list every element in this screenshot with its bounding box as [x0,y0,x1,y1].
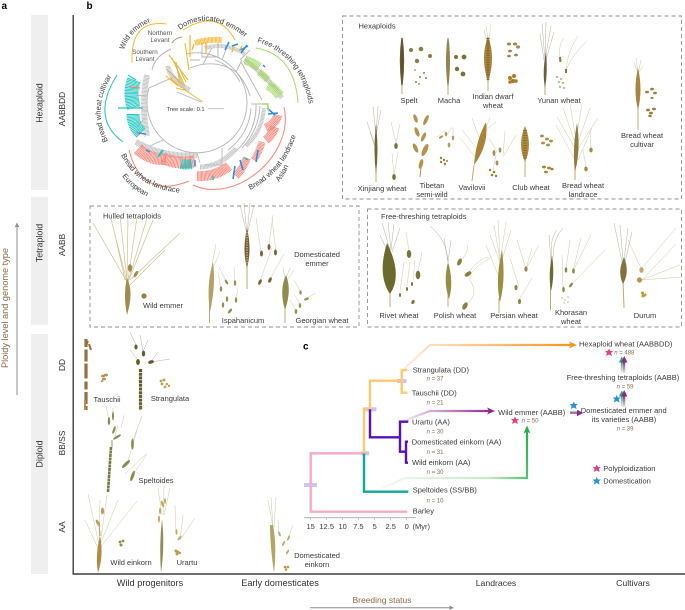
time axis: (Myr) [412,522,430,531]
divergence tree [304,370,408,512]
node: hexaploid wheat: Hexaploid wheat (AABBDD) [579,340,673,348]
tip cluster: domesticated emmer [190,35,248,57]
node: hexaploid wheat: n = 488 [614,350,635,356]
time axis: 10 [339,522,347,531]
genome type labels [57,92,67,533]
Club wheat [512,126,554,192]
macha [438,38,466,105]
taxon labels: n = 37 [427,376,444,382]
time axis [304,518,430,531]
khorasan wheat: Khorasan [555,308,587,317]
tree scale [166,107,224,113]
tauschii: Tauschii [93,395,121,404]
genome type labels: AABBDD [57,92,67,126]
taxon labels: n = 21 [427,400,444,406]
clade labels: Bread wheat landrace [248,135,296,190]
taxon labels: Wild einkorn (AA) [412,458,471,467]
khorasan wheat: wheat [560,317,582,326]
panel: free-threshing tetraploids [368,209,682,327]
taxon labels: Domesticated einkorn (AA) [412,438,502,446]
bread wheat landrace: landrace [569,190,597,199]
early domesticate: domesticated einkorn: Domesticated [294,551,340,560]
durum: Durum [634,311,656,320]
node: wild emmer [498,408,566,424]
arrow: ploidy increasing [15,222,19,395]
Indian dwarf wheat [473,24,520,110]
Tibetan semi-wild [412,114,454,199]
heading: hexaploids: Hexaploids [358,22,396,30]
speltoides: Speltoides [138,476,174,485]
Tibetan semi-wild: Tibetan [420,181,444,190]
clade labels: Free-threshing tetraploids [258,37,314,104]
clade labels [95,15,314,196]
node: free-threshing tetraploids [567,373,680,390]
taxon labels: Strangulata (DD) [413,365,469,374]
legend: Polyploidization [603,464,655,473]
bread wheat cultivar [621,58,664,149]
panel b: phylogenetic tree [95,15,314,196]
taxon labels: Speltoides (SS/BB) [413,486,477,495]
panel: hexaploids [342,16,682,199]
ploidy band: diploid [31,334,48,574]
Yunan wheat [537,22,587,105]
taxon labels: n = 30 [427,430,444,436]
group: diploid wild progenitors [85,332,197,573]
Vavilovii: Vavilovii [459,183,486,192]
domesticated emmer: Domesticated [294,250,340,259]
clade labels: Bread wheat landrace [121,153,180,192]
gray tip combs [136,46,282,167]
urartu: Urartu [177,558,197,567]
tip cluster: free-threshing tetraploids [245,60,280,96]
time axis: 7.5 [353,522,364,531]
node: domesticated emmer and varieties: Domesticated emmer and [581,406,667,415]
breeding stage labels: Landraces [476,578,517,588]
Club wheat: Club wheat [512,183,551,192]
node: domesticated emmer and varieties [581,406,667,432]
taxon labels: Urartu (AA) [412,418,450,426]
clade labels: Southern [132,49,158,56]
arrow: to hexaploid wheat [405,342,577,368]
rivet wheat [379,222,422,320]
clade labels: Wild emmer [119,18,150,48]
clade labels: Levant [136,56,155,63]
legend: Domestication [603,476,651,486]
ploidy band: hexaploid: Hexaploid [34,83,44,123]
ispahanicum: Ispahanicum [222,316,264,325]
macha: Macha [438,96,461,105]
clade labels: Domesticated emmer [178,15,248,36]
time axis: 0 [405,522,409,531]
strangulata [130,332,190,410]
domesticated emmer: emmer [305,259,329,268]
taxon labels: n = 10 [427,498,444,504]
node: wild emmer: n = 50 [522,418,539,424]
rivet wheat: Rivet wheat [379,311,420,320]
Indian dwarf wheat: Indian dwarf [473,92,514,101]
wild emmer: Wild emmer [143,301,183,310]
wild einkorn: Wild einkorn [110,558,152,567]
breeding stage labels: Early domesticates [241,578,319,588]
Vavilovii [459,118,516,192]
panel: hulled tetraploids [90,203,359,327]
time axis: 2.5 [385,522,396,531]
node: hexaploid wheat [579,340,673,356]
legend [593,464,655,486]
khorasan wheat [549,228,605,326]
node: domesticated emmer and varieties: its varieties (AABB) [592,415,657,424]
urartu [158,486,197,573]
tree backbone [136,40,265,165]
domesticated emmer [240,203,340,289]
persian wheat [486,220,539,320]
genome type labels: AABB [57,233,67,256]
strangulata: Strangulata [151,394,190,403]
Georgian wheat: Georgian wheat [296,316,349,325]
speltoides [106,406,174,492]
taxon labels [412,365,502,516]
Indian dwarf wheat: wheat [482,101,504,110]
Georgian wheat [282,267,349,325]
tree scale: Tree scale: 0.1 [166,107,205,113]
domestication and polyploidization stars [570,395,621,409]
Tibetan semi-wild: semi-wild [416,190,448,199]
breeding stage labels: Cultivars [616,578,651,588]
bread wheat cultivar: cultivar [630,140,654,149]
bread wheat landrace: Bread wheat [562,181,605,190]
arrow: to wild emmer (green) [383,426,530,488]
bread wheat landrace [556,104,605,199]
panel label c: c [303,342,309,352]
heading: hulled tetraploids: Hulled tetraploids [103,212,161,220]
spelt: Spelt [400,96,418,105]
Yunan wheat: Yunan wheat [537,96,582,105]
polish wheat: Polish wheat [434,311,477,320]
node: wild emmer: Wild emmer (AABB) [498,408,566,417]
genome type labels: AA [57,521,67,533]
early domesticate: domesticated einkorn: einkorn [305,560,329,569]
arrow: to wild emmer (purple) [403,408,495,421]
taxon labels: n = 30 [427,470,444,476]
panel label b: b [86,1,93,12]
panel c: divergence and polyploidization [304,340,680,531]
breeding stage labels [117,578,651,588]
y axis title: Ploidy level and genome type [0,248,10,368]
ploidy band: tetraploid [31,197,48,325]
durum [614,223,682,320]
polish wheat [430,226,492,320]
time axis: 15 [307,522,315,531]
tip cluster: wild emmer [166,43,203,102]
x axis title: Breeding status [352,595,412,605]
clade labels: Bread wheat cultivar [95,74,111,143]
arrow: breeding status [310,606,454,610]
time axis: 12.5 [319,522,334,531]
time axis: 5 [373,522,377,531]
transition arrows between nodes [570,356,627,416]
Xinjiang wheat: Xinjiang wheat [358,184,407,193]
node: free-threshing tetraploids: n = 59 [617,384,634,390]
genome type labels: BB/SS [57,430,67,455]
taxon labels: n = 31 [427,450,444,456]
ploidy band: hexaploid [31,15,48,190]
clade labels: Asian [276,165,288,182]
clade arcs [105,21,298,190]
clade labels: Levant [151,37,170,44]
taxon labels: Tauschii (DD) [412,388,457,398]
ploidy band: tetraploid: Tetraploid [34,224,44,262]
clade labels: European [122,173,148,196]
node: domesticated emmer and varieties: n = 39 [617,426,634,432]
persian wheat: Persian wheat [490,311,539,320]
tip cluster: European landrace [138,149,195,166]
taxon labels: Barley [413,506,434,516]
node: free-threshing tetraploids: Free-threshing tetraploids (AABB) [567,373,680,382]
tip cluster: Asian landrace [197,104,278,180]
wild einkorn [85,494,152,573]
breeding stage labels: Wild progenitors [117,578,184,588]
heading: free-threshing tetraploids: Free-threshing tetraploids [381,212,467,221]
wild emmer [93,216,183,315]
early domesticate: domesticated einkorn [268,497,340,573]
ploidy band: diploid: Diploid [34,440,44,468]
panel label a: a [2,1,8,12]
Xinjiang wheat [358,106,407,193]
tip cluster: bread wheat cultivar [118,75,146,134]
spelt [400,38,432,105]
bread wheat cultivar: Bread wheat [621,131,664,140]
tauschii [85,339,121,410]
clade labels: Northern [148,30,173,37]
genome type labels: DD [57,359,67,371]
ispahanicum [209,244,264,325]
